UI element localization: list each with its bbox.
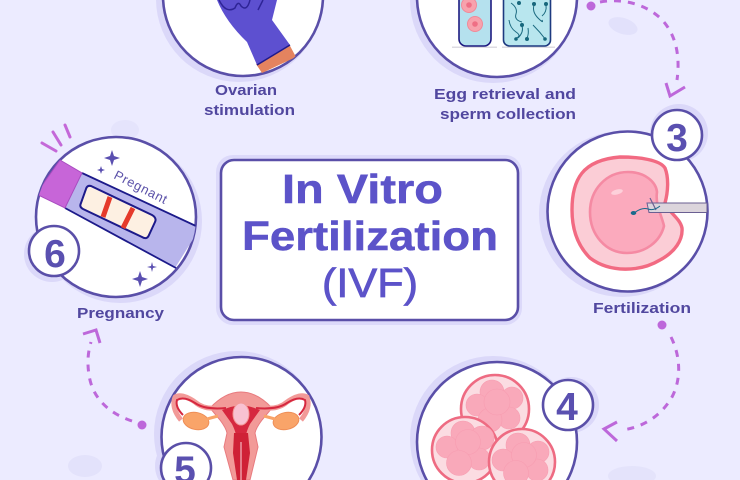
icon: egg with pipette <box>572 157 707 269</box>
label: egg retrieval and sperm collection: sperm collection <box>440 106 576 123</box>
title <box>242 166 498 306</box>
label: ovarian stimulation: Ovarian <box>215 82 277 99</box>
label: egg retrieval and sperm collection <box>434 86 576 123</box>
icon: pregnancy test <box>36 160 200 268</box>
badge: number 6 <box>29 226 79 276</box>
icon: gloved hand <box>217 0 296 73</box>
icon: pink ticks <box>42 125 70 151</box>
label: egg retrieval and sperm collection: Egg retrieval and <box>434 86 576 103</box>
arrow: step 5 to step 6 <box>83 330 146 430</box>
text: pregnant: Pregnant <box>112 167 170 207</box>
arrow: step 3 to step 4 <box>604 320 679 441</box>
badge: number 3: 3 <box>666 117 688 160</box>
badge: number 3 <box>652 110 702 160</box>
panel: title box <box>216 155 522 325</box>
icon: test tubes <box>452 0 555 48</box>
icon: uterus <box>174 392 308 480</box>
badge: number 4 <box>543 380 593 430</box>
label: ovarian stimulation: stimulation <box>204 102 295 119</box>
arrow: step 2 to step 3 <box>586 1 685 96</box>
panel: step 3 fertilization <box>539 104 708 317</box>
panel: step 2 egg retrieval and sperm collection <box>410 0 577 123</box>
badge: number 6: 6 <box>44 233 66 276</box>
title: (IVF) <box>322 260 418 306</box>
title: In Vitro <box>282 166 443 212</box>
label: fertilization: Fertilization <box>593 300 691 317</box>
panel: step 4 embryo development <box>410 356 599 480</box>
label: ovarian stimulation <box>204 82 295 119</box>
panel: step 1 ovarian stimulation <box>156 0 323 119</box>
panel: step 5 embryo transfer <box>154 351 322 480</box>
title: Fertilization <box>242 213 498 259</box>
badge: number 5 <box>161 443 211 480</box>
badge: number 4: 4 <box>556 386 578 429</box>
label: pregnancy: Pregnancy <box>77 305 165 322</box>
icon: dividing cells <box>432 375 555 480</box>
icon: sparkles <box>97 150 157 287</box>
panel: step 6 pregnancy <box>24 125 202 322</box>
